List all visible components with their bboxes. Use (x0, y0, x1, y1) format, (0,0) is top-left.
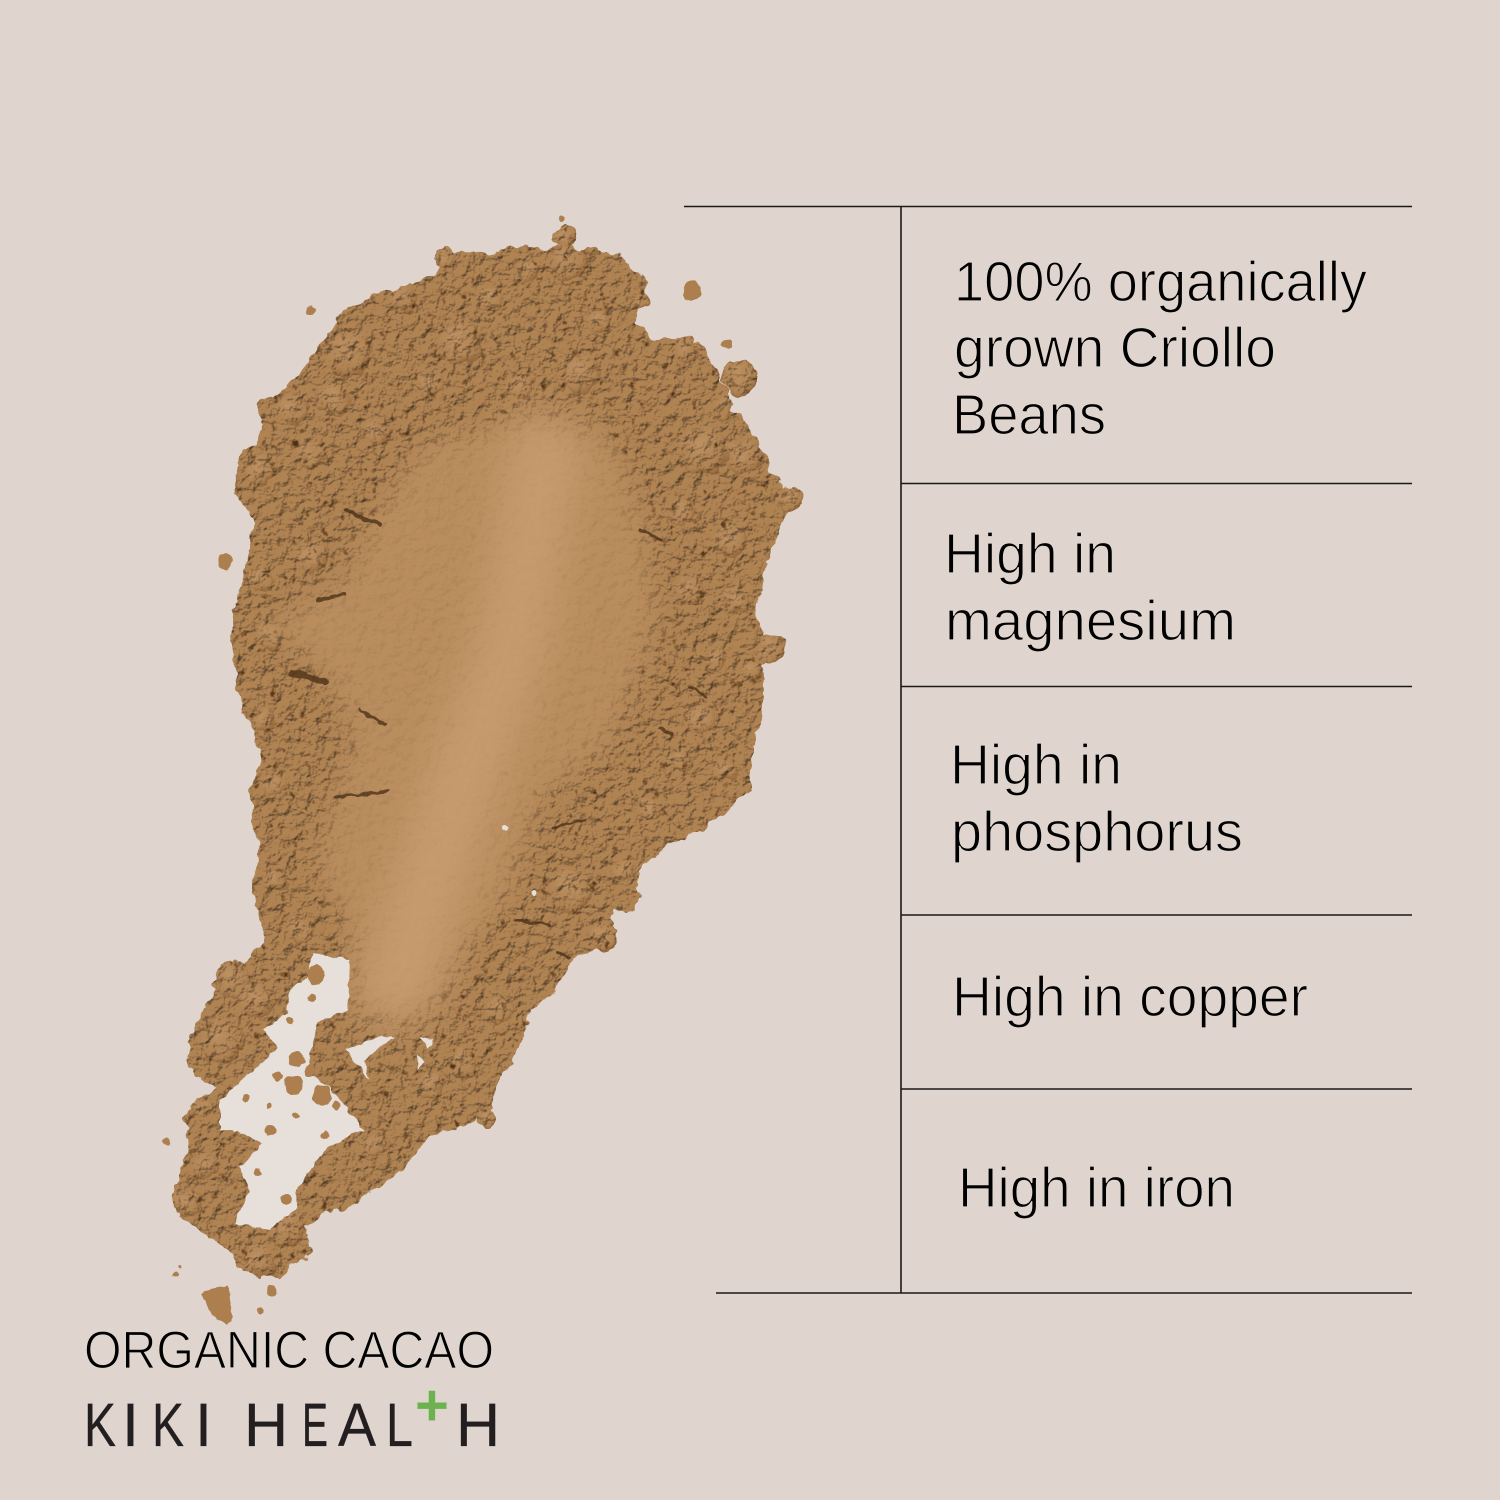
logo plus sign: + (415, 1373, 449, 1438)
loose crumbs inside gap (243, 966, 340, 1205)
table grid lines (684, 206, 1412, 1293)
logo: Kiki Health: A (338, 1391, 376, 1459)
powder body with lumps (173, 226, 803, 1278)
benefit: criollo beans (952, 250, 1367, 447)
logo: Kiki Health: I (195, 1391, 212, 1459)
logo: Kiki Health: K (152, 1391, 184, 1459)
cacao powder pile (162, 216, 803, 1326)
benefit: magnesium: magnesium (945, 589, 1236, 653)
benefit: criollo beans: Beans (952, 383, 1106, 447)
logo: Kiki Health: K (84, 1391, 116, 1459)
light streak in centre (395, 450, 545, 990)
benefit: phosphorus: phosphorus (951, 800, 1243, 864)
logo: Kiki Health (84, 1373, 500, 1459)
logo: Kiki Health: E (302, 1391, 328, 1459)
dark cracks (293, 510, 706, 958)
logo: Kiki Health: H (244, 1391, 288, 1459)
gaps in the powder (220, 824, 538, 1230)
benefit: phosphorus (950, 733, 1243, 864)
benefit: criollo beans: 100% organically (954, 250, 1367, 314)
logo: Kiki Health: H (456, 1391, 500, 1459)
product name: ORGANIC CACAO (84, 1321, 494, 1380)
benefit: magnesium: High in (944, 522, 1116, 586)
benefit: magnesium (944, 522, 1236, 653)
stray crumbs (162, 216, 732, 1326)
smooth pressed centre (270, 413, 656, 1025)
benefit: phosphorus: High in (950, 733, 1122, 797)
benefit: iron: High in iron (958, 1156, 1235, 1220)
logo: Kiki Health: L (386, 1391, 413, 1459)
logo: Kiki Health: I (122, 1391, 139, 1459)
benefit: copper: High in copper (952, 965, 1308, 1029)
benefit: criollo beans: grown Criollo (954, 316, 1276, 380)
